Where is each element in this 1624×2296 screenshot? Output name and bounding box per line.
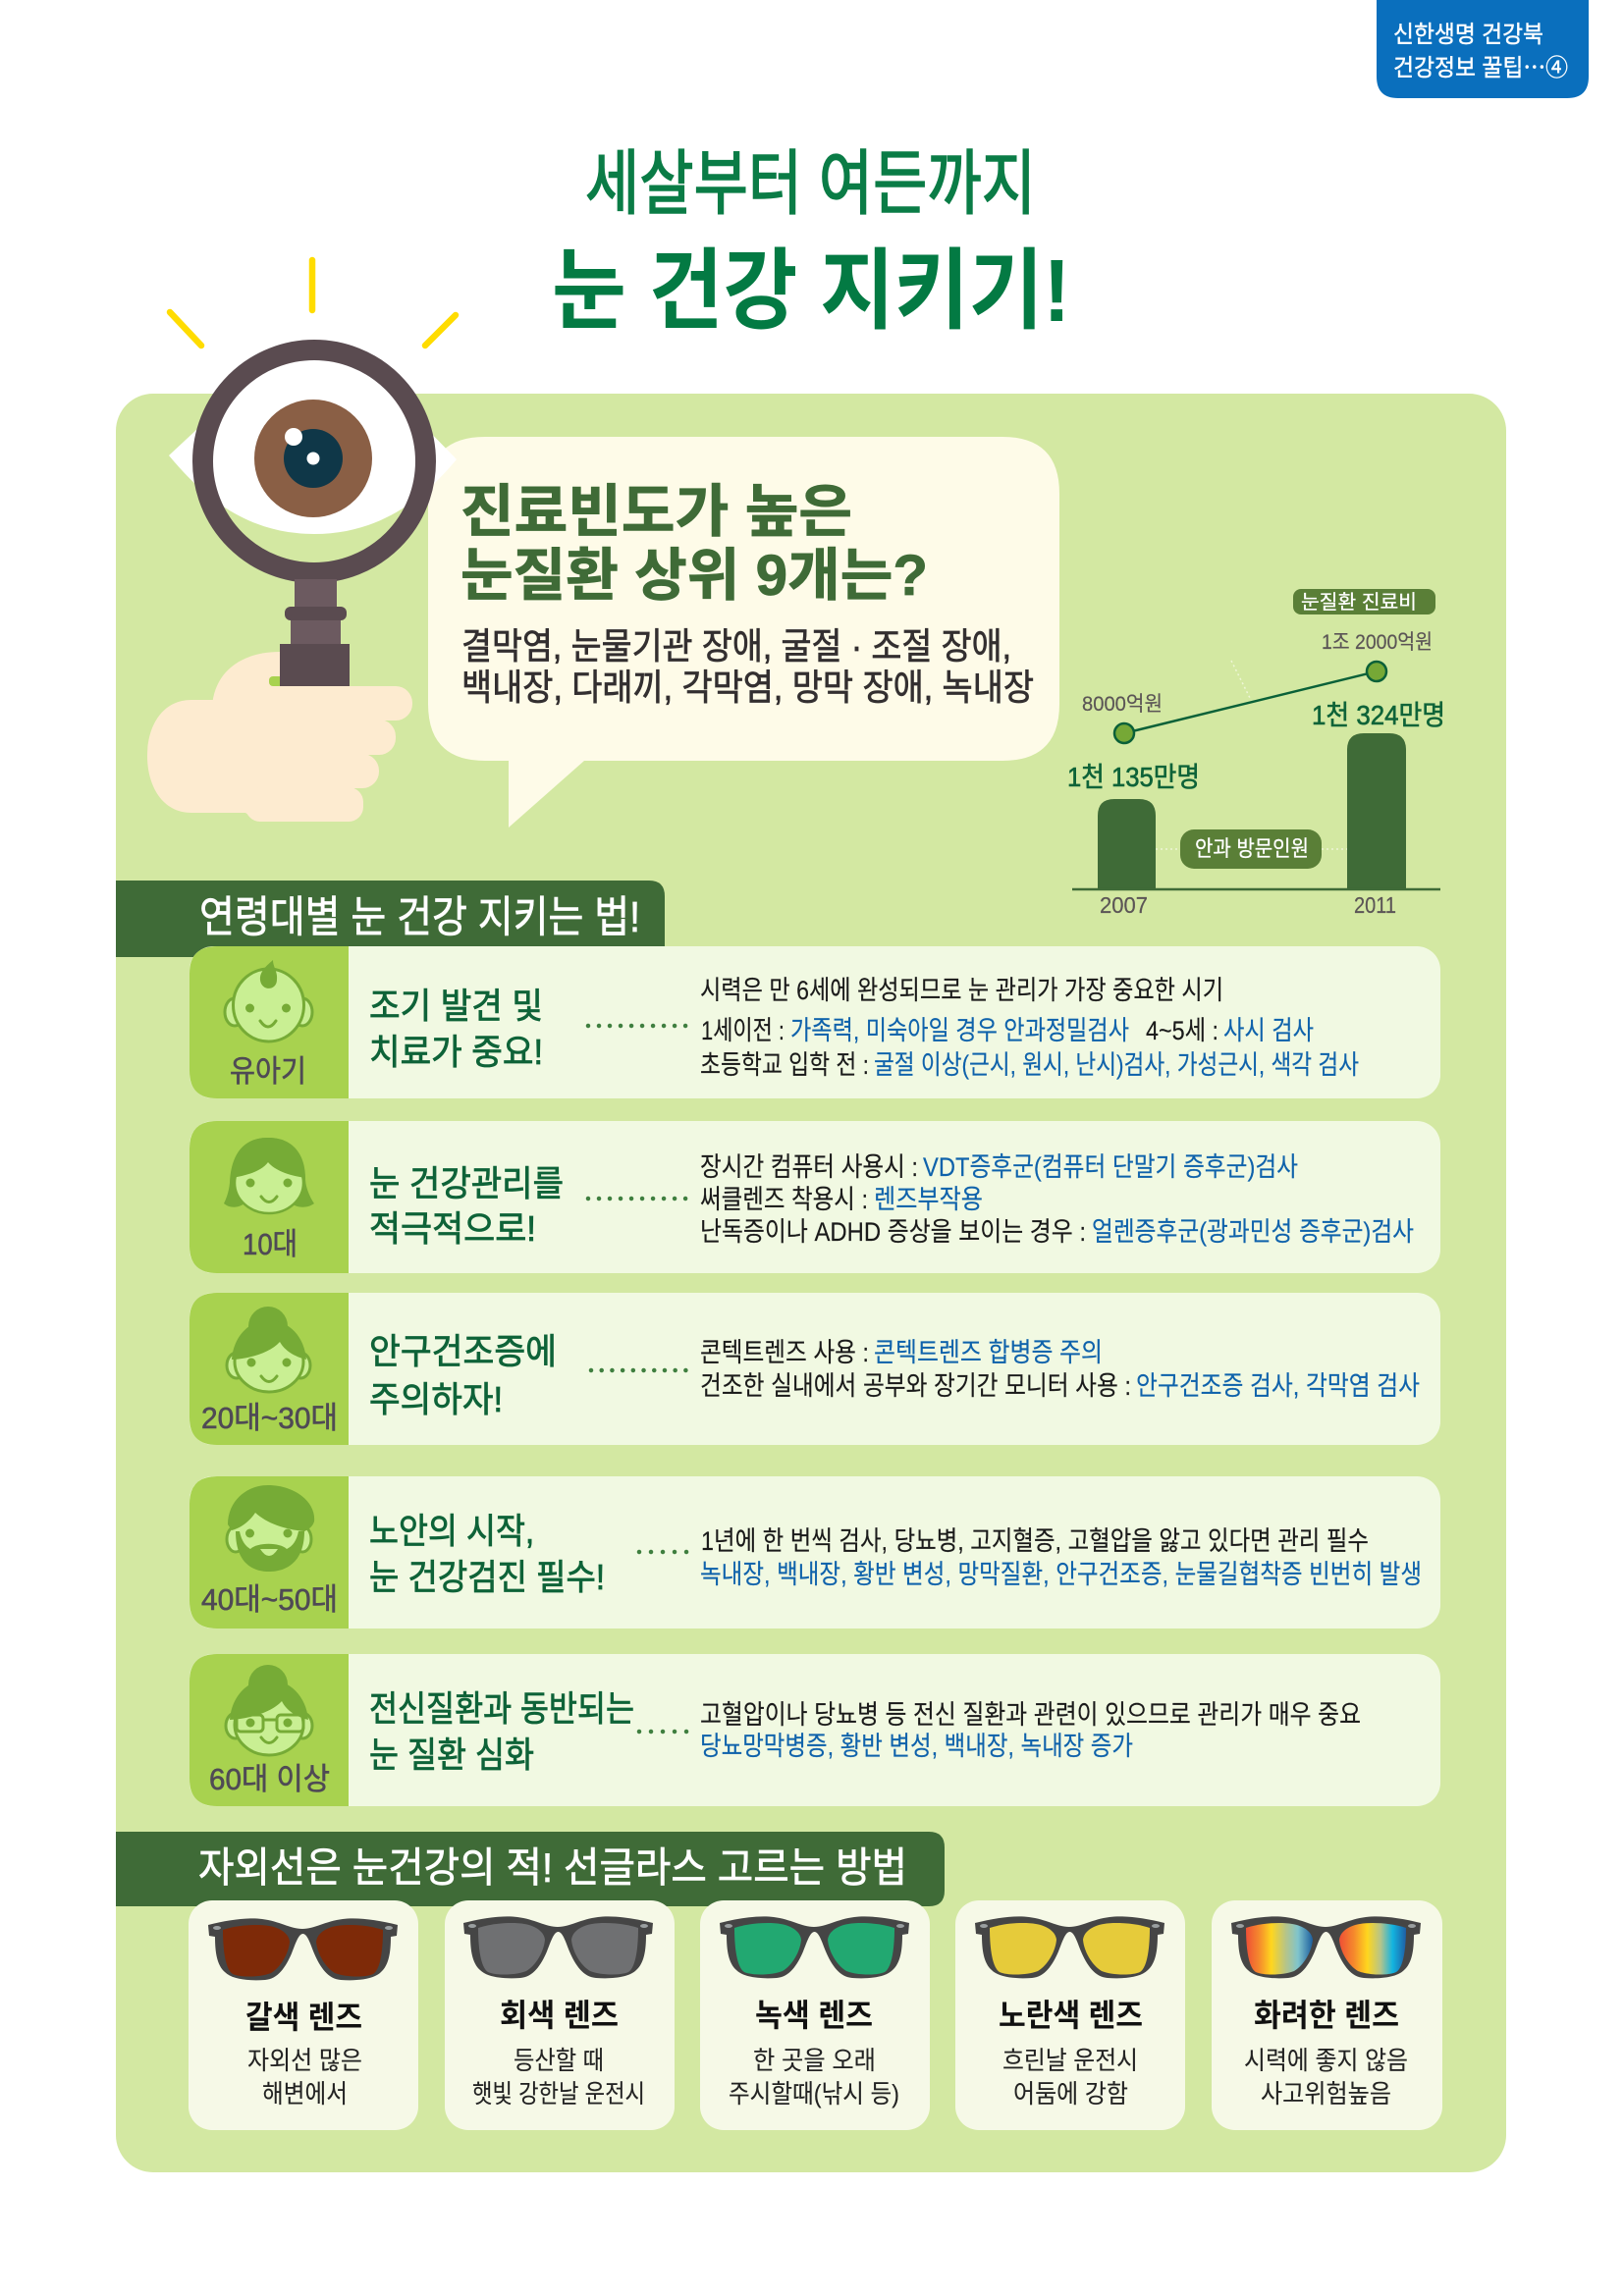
icon: magnifying glass with eye and hand bbox=[147, 260, 457, 822]
text: 20s-30s advice: 콘텍트렌즈 사용 : bbox=[700, 1338, 869, 1367]
heading: manage actively bbox=[369, 1163, 564, 1249]
heading: systemic disease: 전신질환과 동반되는 bbox=[369, 1688, 634, 1729]
speech bubble: top eye diseases: 백내장, 다래끼, 각막염, 망막 장애, 녹내장 bbox=[461, 667, 1034, 708]
row: teens bbox=[189, 1121, 1440, 1273]
line: medical cost bbox=[1114, 662, 1386, 743]
card: gray lens bbox=[445, 1900, 675, 2130]
icon: green sunglasses bbox=[720, 1916, 909, 1978]
chart: visits and medical costs 2007 vs 2011: 2011 bbox=[1354, 892, 1396, 918]
card: colorful lens: 시력에 좋지 않음 bbox=[1244, 2046, 1408, 2075]
title bbox=[552, 145, 1070, 341]
card: yellow lens: 어둠에 강함 bbox=[1013, 2079, 1128, 2109]
card: yellow lens: 흐린날 운전시 bbox=[1002, 2046, 1138, 2075]
icon: baby face bbox=[225, 960, 312, 1041]
card: brown lens: 해변에서 bbox=[262, 2079, 348, 2109]
chart: visits and medical costs 2007 vs 2011 bbox=[1067, 589, 1445, 918]
axis and dotted leader lines bbox=[1072, 661, 1440, 889]
text: 40s-50s advice: 1년에 한 번씩 검사, 당뇨병, 고지혈증, 고혈압을 앓고 있다면 관리 필수 bbox=[701, 1526, 1369, 1556]
tag: series label bbox=[1377, 0, 1589, 98]
text: 60+ advice: 당뇨망막병증, 황반 변성, 백내장, 녹내장 증가 bbox=[700, 1732, 1133, 1761]
text: infant advice: 가족력, 미숙아일 경우 안과정밀검사 bbox=[790, 1016, 1129, 1045]
row: 20s-30s: 20대~30대 bbox=[201, 1401, 338, 1435]
icon: gray sunglasses bbox=[463, 1916, 653, 1978]
pill: medical cost label: 눈질환 진료비 bbox=[1301, 591, 1417, 614]
chart: visits and medical costs 2007 vs 2011: 1조 2000억원 bbox=[1322, 631, 1433, 654]
row: 40s-50s: 40대~50대 bbox=[201, 1582, 338, 1617]
row: infants bbox=[189, 946, 1440, 1098]
text: teen advice: VDT증후군(컴퓨터 단말기 증후군)검사 bbox=[923, 1152, 1298, 1182]
text: 60+ advice: 고혈압이나 당뇨병 등 전신 질환과 관련이 있으므로 관리가 매우 중요 bbox=[700, 1700, 1361, 1730]
text: infant advice: 사시 검사 bbox=[1223, 1016, 1314, 1045]
heading: choosing sunglasses bbox=[116, 1832, 945, 1906]
bar: 2011 visitors bbox=[1347, 733, 1406, 889]
speech bubble: top eye diseases: 눈질환 상위 9개는? bbox=[460, 544, 928, 608]
icon: yellow sunglasses bbox=[975, 1916, 1164, 1978]
card: gray lens: 회색 렌즈 bbox=[500, 1998, 619, 2033]
text: 20s-30s advice: 콘텍트렌즈 합병증 주의 bbox=[874, 1338, 1103, 1367]
text: infant advice: 시력은 만 6세에 완성되므로 눈 관리가 가장 중요한 시기 bbox=[700, 976, 1223, 1005]
text: teen advice: 얼렌증후군(광과민성 증후군)검사 bbox=[1092, 1217, 1414, 1247]
text: 60+ advice bbox=[700, 1700, 1361, 1761]
text: 40s-50s advice: 녹내장, 백내장, 황반 변성, 망막질환, 안구건조증, 눈물길협착증 빈번히 발생 bbox=[700, 1560, 1422, 1589]
text: teen advice: 렌즈부작용 bbox=[874, 1185, 983, 1214]
heading: dry eye: 주의하자! bbox=[369, 1379, 503, 1419]
heading: dry eye bbox=[369, 1331, 557, 1419]
bar: 2007 visitors bbox=[1098, 799, 1156, 889]
text: 40s-50s advice bbox=[700, 1526, 1422, 1589]
tag: series label: 건강정보 꿀팁⋯④ bbox=[1393, 55, 1568, 81]
text: infant advice: 4~5세 : bbox=[1146, 1016, 1218, 1045]
text: teen advice: 난독증이나 ADHD 증상을 보이는 경우 : bbox=[700, 1217, 1086, 1247]
card: gray lens: 햇빛 강한날 운전시 bbox=[472, 2079, 645, 2109]
heading: manage actively: 적극적으로! bbox=[369, 1208, 536, 1249]
heading: manage actively: 눈 건강관리를 bbox=[369, 1163, 564, 1203]
heading: choosing sunglasses: 자외선은 눈건강의 적! 선글라스 고르는 방법 bbox=[198, 1844, 907, 1891]
card: green lens: 한 곳을 오래 bbox=[753, 2046, 876, 2075]
text: 20s-30s advice bbox=[700, 1338, 1420, 1401]
chart: visits and medical costs 2007 vs 2011: 1천 135만명 bbox=[1067, 762, 1200, 792]
speech bubble: top eye diseases: 진료빈도가 높은 bbox=[460, 480, 852, 544]
card: gray lens: 등산할 때 bbox=[514, 2046, 604, 2075]
row: 40s-50s bbox=[189, 1476, 1440, 1629]
card: brown lens bbox=[189, 1900, 418, 2130]
text: infant advice: 굴절 이상(근시, 원시, 난시)검사, 가성근시, 색각 검사 bbox=[874, 1050, 1359, 1080]
icon: rainbow sunglasses bbox=[1231, 1916, 1421, 1978]
title: 눈 건강 지키기! bbox=[552, 242, 1070, 341]
row: 60 and over: 60대 이상 bbox=[209, 1762, 330, 1796]
card: yellow lens: 노란색 렌즈 bbox=[999, 1998, 1143, 2033]
row: infants: 유아기 bbox=[230, 1054, 306, 1089]
card: colorful lens bbox=[1212, 1900, 1442, 2130]
heading: early detection bbox=[369, 986, 543, 1072]
card: colorful lens: 사고위험높음 bbox=[1261, 2079, 1391, 2109]
heading: presbyopia: 노안의 시작, bbox=[369, 1511, 534, 1551]
speech bubble: top eye diseases bbox=[428, 437, 1059, 828]
heading: eye care by age: 연령대별 눈 건강 지키는 법! bbox=[199, 893, 640, 941]
text: teen advice bbox=[700, 1152, 1414, 1247]
icon: grandmother face bbox=[226, 1665, 312, 1755]
row: teens: 10대 bbox=[243, 1227, 298, 1261]
text: teen advice: 장시간 컴퓨터 사용시 : bbox=[700, 1152, 918, 1182]
title: 세살부터 여든까지 bbox=[585, 145, 1036, 224]
card: green lens: 녹색 렌즈 bbox=[755, 1998, 873, 2033]
heading: systemic disease bbox=[369, 1688, 634, 1775]
pill: visitors label: 안과 방문인원 bbox=[1195, 836, 1309, 861]
tag: series label: 신한생명 건강북 bbox=[1393, 22, 1543, 48]
icon: bearded man face bbox=[227, 1485, 314, 1572]
row: 20s-30s bbox=[189, 1293, 1440, 1445]
speech bubble: top eye diseases: 결막염, 눈물기관 장애, 굴절 · 조절 장애, bbox=[461, 626, 1011, 667]
icon: brown sunglasses bbox=[208, 1918, 398, 1980]
card: yellow lens bbox=[955, 1900, 1185, 2130]
heading: dry eye: 안구건조증에 bbox=[369, 1331, 557, 1371]
text: infant advice: 1세이전 : bbox=[701, 1016, 785, 1045]
text: 20s-30s advice: 안구건조증 검사, 각막염 검사 bbox=[1136, 1371, 1420, 1401]
row: 60 and over bbox=[189, 1654, 1440, 1806]
card: brown lens: 갈색 렌즈 bbox=[245, 2000, 362, 2035]
icon: woman face bbox=[227, 1307, 310, 1392]
heading: eye care by age bbox=[116, 881, 665, 957]
pill: visitors label bbox=[1180, 829, 1322, 869]
chart: visits and medical costs 2007 vs 2011: 2007 bbox=[1100, 892, 1148, 918]
card: green lens bbox=[700, 1900, 930, 2130]
heading: presbyopia: 눈 건강검진 필수! bbox=[369, 1557, 605, 1597]
chart: visits and medical costs 2007 vs 2011: 8000억원 bbox=[1082, 693, 1163, 716]
chart: visits and medical costs 2007 vs 2011: 1천 324만명 bbox=[1312, 700, 1445, 730]
heading: early detection: 치료가 중요! bbox=[369, 1032, 543, 1072]
heading: early detection: 조기 발견 및 bbox=[369, 986, 543, 1026]
text: infant advice: 초등학교 입학 전 : bbox=[700, 1050, 869, 1080]
heading: systemic disease: 눈 질환 심화 bbox=[369, 1735, 534, 1775]
text: infant advice bbox=[700, 976, 1359, 1080]
card: colorful lens: 화려한 렌즈 bbox=[1254, 1998, 1399, 2033]
text: 20s-30s advice: 건조한 실내에서 공부와 장기간 모니터 사용 : bbox=[700, 1371, 1131, 1401]
text: teen advice: 써클렌즈 착용시 : bbox=[700, 1185, 868, 1214]
icon: girl face bbox=[224, 1138, 314, 1213]
card: brown lens: 자외선 많은 bbox=[247, 2046, 362, 2075]
heading: presbyopia bbox=[369, 1511, 605, 1597]
pill: medical cost label bbox=[1293, 589, 1435, 614]
panel: main green background bbox=[116, 394, 1506, 2172]
card: green lens: 주시할때(낚시 등) bbox=[729, 2079, 899, 2109]
